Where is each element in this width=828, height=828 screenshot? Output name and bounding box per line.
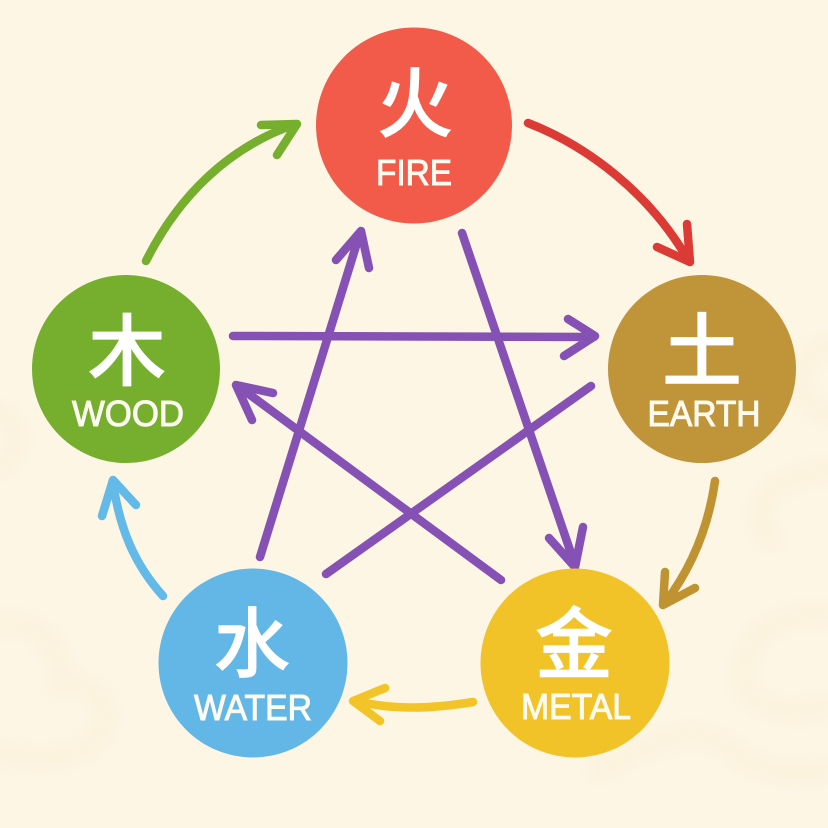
arrow: metal to water (353, 688, 473, 721)
node: water: WATER (194, 687, 312, 728)
node: fire (316, 28, 512, 224)
node: metal: METAL (521, 686, 631, 727)
node: earth: EARTH (648, 393, 760, 434)
arrow: metal to wood (236, 385, 501, 580)
node: water: 水 (214, 583, 290, 693)
node: wood: 木 (88, 290, 166, 402)
arrow: fire to earth (528, 123, 690, 262)
node: metal (480, 568, 670, 758)
arrow: water to wood (102, 480, 163, 596)
arrow: wood to fire (146, 124, 297, 261)
node: fire: 火 (377, 43, 453, 153)
arrow: earth to metal (663, 481, 715, 605)
node: wood: WOOD (72, 393, 184, 434)
node: metal: 金 (535, 583, 613, 695)
arrow: earth to water (326, 386, 591, 574)
arrow: water to fire (260, 231, 369, 557)
arrow: fire to metal (462, 233, 583, 567)
node: fire: FIRE (376, 152, 452, 193)
node: water (158, 568, 348, 758)
node: wood (32, 275, 220, 463)
arrow: wood to earth (233, 319, 595, 356)
node: earth (608, 275, 796, 463)
node: earth: 土 (662, 288, 742, 404)
